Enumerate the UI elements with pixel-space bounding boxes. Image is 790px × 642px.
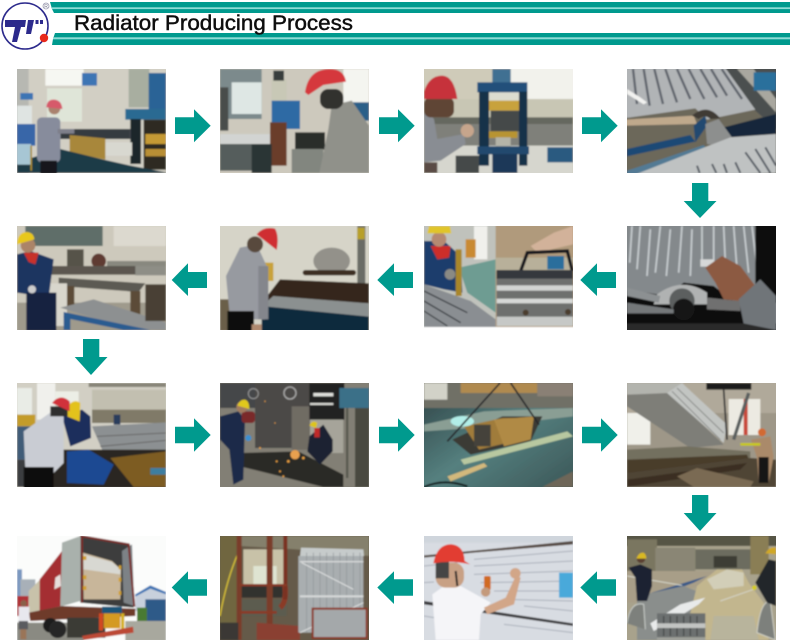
arrow: left 3: [172, 263, 207, 296]
company logo: R: [44, 4, 48, 10]
photo 11: pickling pool: [424, 383, 573, 487]
arrow: left 6: [172, 571, 207, 604]
photo 9: workers assembling radiator: [17, 383, 166, 487]
photo 4: stamped radiator plate: [627, 69, 776, 173]
arrow: down 3: [684, 495, 716, 531]
arrow: down 1: [684, 183, 716, 218]
arrow: left 1: [580, 263, 616, 296]
photo 6: weld quality checks, two views: [424, 226, 573, 328]
photo 3: worker inspecting at press: [424, 69, 573, 173]
arrow: right 6: [582, 418, 618, 452]
arrow: down 2: [75, 339, 108, 375]
photo 13: powder coating line: [627, 536, 776, 640]
arrow: right 1: [175, 109, 211, 142]
title: Radiator Producing Process: [74, 12, 353, 35]
arrow: right 2: [379, 109, 415, 142]
arrow: right 4: [175, 418, 211, 452]
photo 16: container loading on truck: [17, 536, 166, 640]
arrow: right 3: [582, 109, 618, 142]
header stripes top: [50, 2, 790, 13]
header banner: [2, 2, 790, 49]
company logo: [2, 3, 49, 49]
photo 15: finished radiator in paint line: [220, 536, 369, 640]
arrow: left 5: [377, 571, 413, 604]
arrow: right 5: [379, 418, 415, 452]
arrow: left 4: [580, 571, 616, 604]
header stripes bottom: [52, 33, 790, 45]
photo 12: radiator lifted from bath: [627, 383, 776, 487]
photo 14: technician measuring radiator: [424, 536, 573, 640]
arrow: left 2: [377, 263, 413, 296]
photo 10: welding with sparks: [220, 383, 369, 487]
photo 5: hand inspecting plate: [627, 226, 776, 330]
photo 7: worker at treatment tank: [220, 226, 369, 330]
photo 1: operator at press line: [17, 69, 166, 173]
photo 2: worker at spot-welder: [220, 69, 369, 173]
photo 8: worker at pipe fixture: [17, 226, 166, 330]
